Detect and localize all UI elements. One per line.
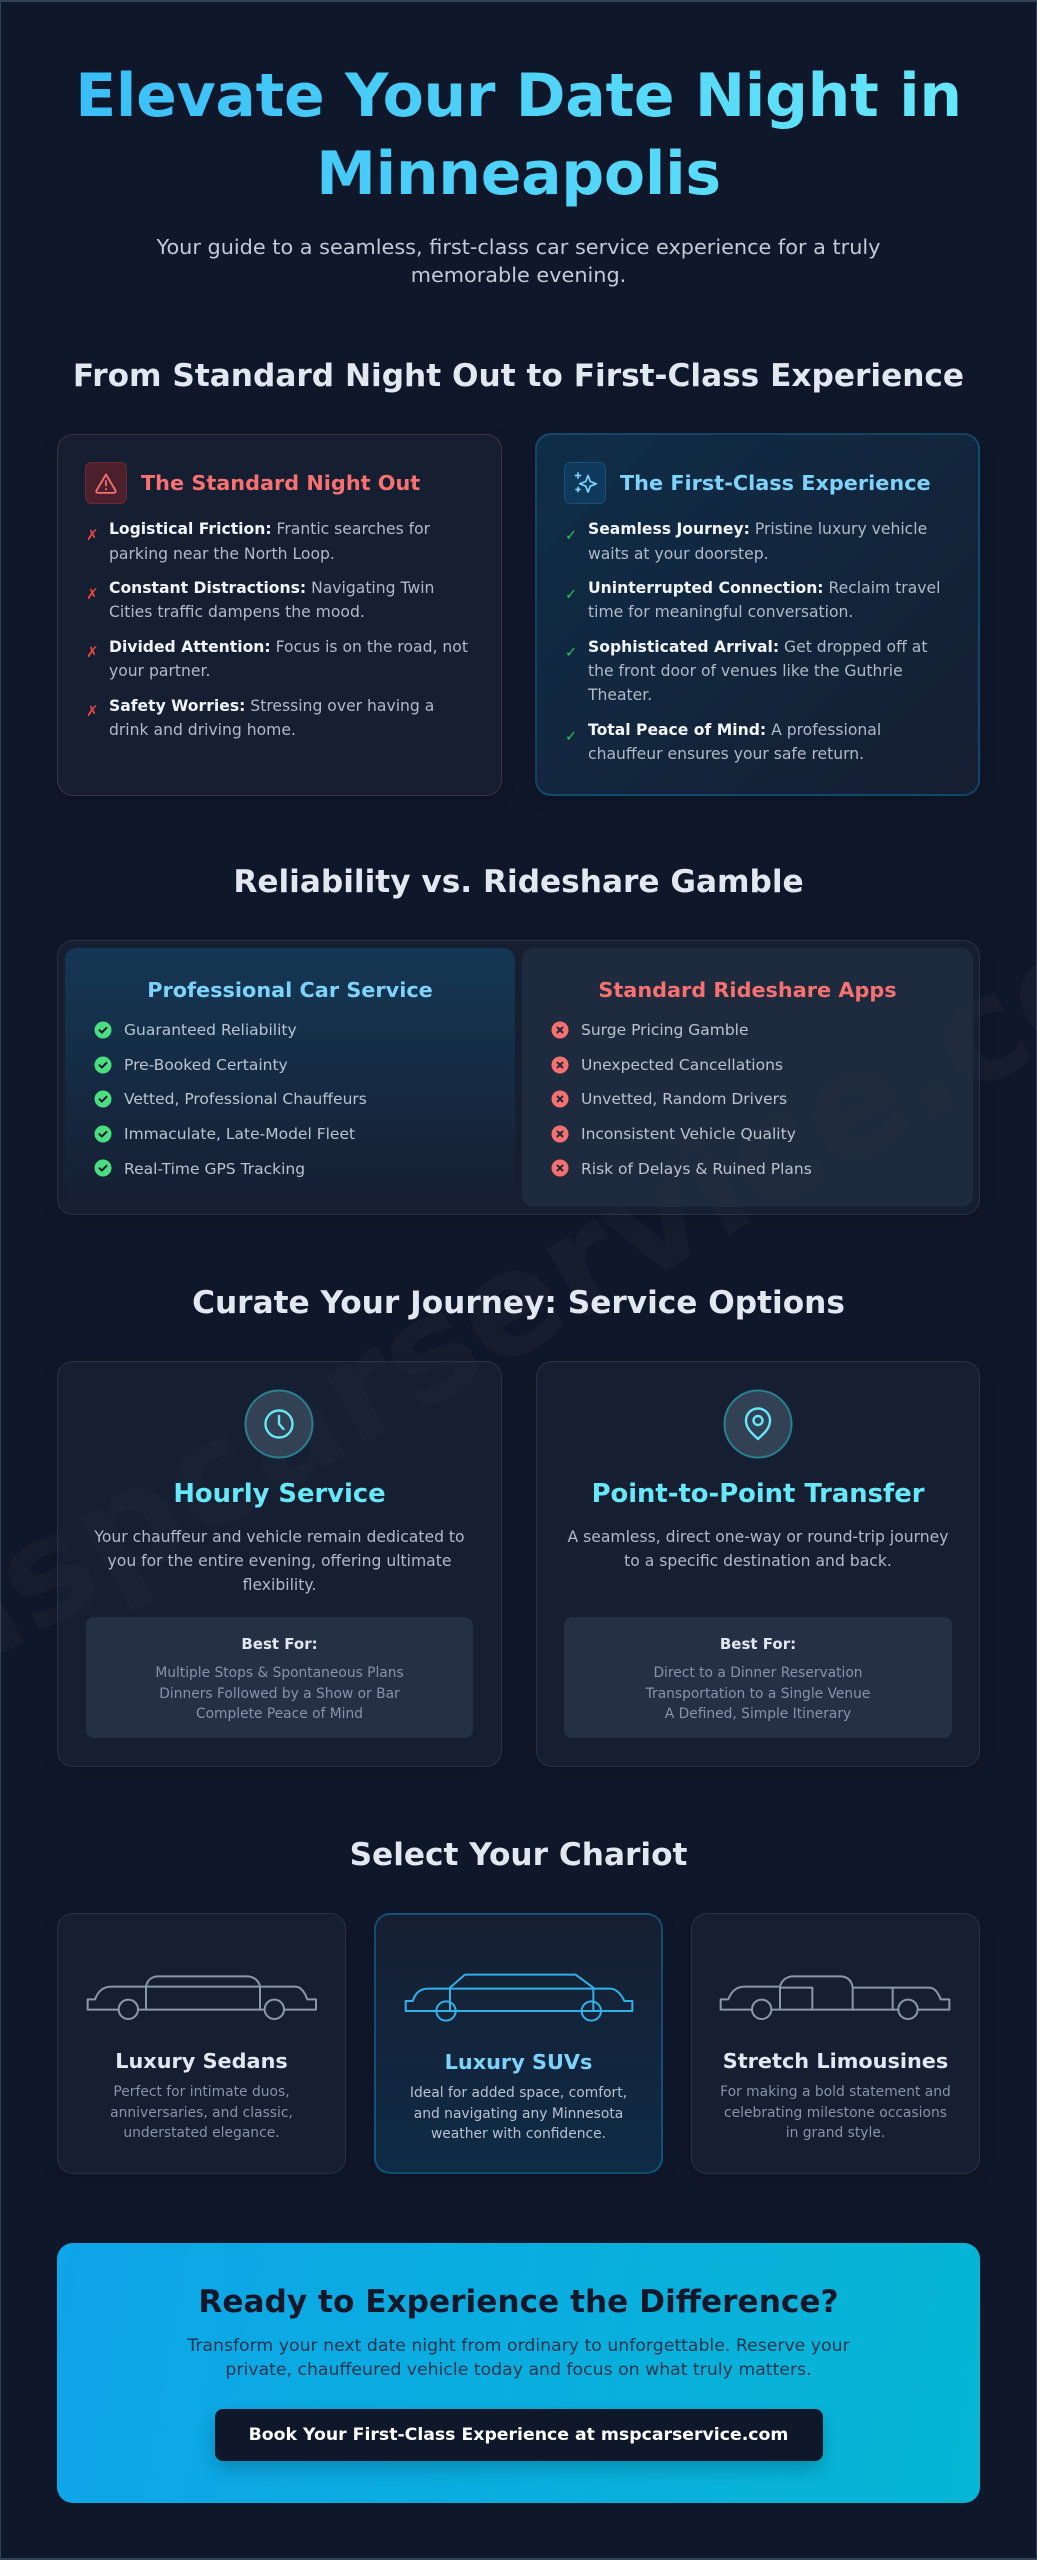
list item: sophisticated arrival: the front door of venues like the Guthrie bbox=[588, 662, 903, 680]
panel: the first-class experience bbox=[535, 433, 980, 796]
icon: limousine bbox=[720, 1975, 950, 2020]
button: book: Book Your First-Class Experience at mspcarservice.com bbox=[249, 2425, 788, 2445]
item: immaculate fleet: Immaculate, Late-Model Fleet bbox=[124, 1125, 355, 1143]
text: limousines description: celebrating milestone occasions bbox=[724, 2105, 947, 2121]
heading: point-to-point transfer: Point-to-Point Transfer bbox=[592, 1479, 924, 1509]
icon: x circle bbox=[552, 1090, 568, 1108]
heading: luxury suvs: Luxury SUVs bbox=[445, 2050, 592, 2074]
text: sedans description: anniversaries, and classic, bbox=[110, 2105, 293, 2121]
panel: professional car service bbox=[65, 948, 515, 1207]
heading: hourly service: Hourly Service bbox=[173, 1479, 386, 1509]
icon: check: ✓ bbox=[565, 729, 577, 745]
item: guaranteed reliability: Guaranteed Reliability bbox=[124, 1021, 297, 1039]
icon: check: ✓ bbox=[565, 645, 577, 661]
icon: cross: ✗ bbox=[86, 526, 99, 544]
button: book bbox=[214, 2409, 822, 2461]
list item: total peace of mind bbox=[588, 721, 881, 763]
heading: best for: Best For: bbox=[241, 1635, 318, 1653]
item: delays: Risk of Delays & Ruined Plans bbox=[581, 1160, 812, 1178]
list: hourly uses bbox=[155, 1665, 404, 1722]
subtitle bbox=[156, 235, 880, 287]
list item: seamless journey: Seamless Journey: Pristine luxury vehicle bbox=[588, 520, 927, 538]
subtitle: memorable evening. bbox=[411, 263, 626, 287]
icon: check circle bbox=[94, 1160, 112, 1176]
text: transfer description: A seamless, direct one-way or round-trip journey bbox=[568, 1528, 948, 1546]
panel: best for transfer bbox=[564, 1617, 952, 1738]
heading: standard rideshare apps: Standard Rideshare Apps bbox=[598, 978, 897, 1002]
text: hourly description: you for the entire evening, offering ultimate bbox=[108, 1552, 451, 1570]
list item: sophisticated arrival: Sophisticated Arrival: Get dropped off at bbox=[588, 638, 927, 656]
text: suvs description: and navigating any Minnesota bbox=[414, 2106, 623, 2122]
heading: the standard night out: The Standard Night Out bbox=[141, 471, 420, 495]
list item: logistical friction bbox=[109, 520, 430, 563]
text: suvs description bbox=[410, 2085, 627, 2142]
list: hourly uses: Complete Peace of Mind bbox=[196, 1706, 363, 1722]
list item: uninterrupted connection bbox=[588, 579, 940, 621]
list item: constant distractions: Constant Distractions: Navigating Twin bbox=[109, 579, 434, 597]
heading: luxury sedans: Luxury Sedans bbox=[115, 2049, 288, 2073]
text: call to action body: Transform your next date night from ordinary to unforgettable. Reserve your bbox=[187, 2336, 850, 2356]
title: Minneapolis bbox=[316, 139, 721, 209]
panel: luxury sedans bbox=[57, 1913, 346, 2174]
icon: x circle bbox=[552, 1160, 568, 1176]
list item: safety worries bbox=[109, 697, 434, 739]
list item: uninterrupted connection: time for meaningful conversation. bbox=[588, 603, 853, 621]
list item: seamless journey bbox=[588, 520, 927, 563]
list item: safety worries: drink and driving home. bbox=[109, 721, 296, 739]
item: pre-booked certainty: Pre-Booked Certainty bbox=[124, 1056, 288, 1074]
text: hourly description bbox=[94, 1528, 465, 1594]
list item: uninterrupted connection: Uninterrupted Connection: Reclaim travel bbox=[588, 579, 940, 597]
text: call to action body bbox=[187, 2336, 850, 2380]
list item: safety worries: Safety Worries: Stressing over having a bbox=[109, 697, 434, 715]
heading: the first-class experience: The First-Class Experience bbox=[620, 471, 931, 495]
item: surge pricing: Surge Pricing Gamble bbox=[581, 1021, 749, 1039]
list: hourly uses: Multiple Stops & Spontaneous Plans bbox=[155, 1665, 404, 1681]
list: transfer uses: A Defined, Simple Itinerary bbox=[665, 1706, 851, 1722]
panel: call to action bbox=[57, 2243, 980, 2503]
text: suvs description: weather with confidence. bbox=[431, 2126, 606, 2142]
heading: select your chariot: Select Your Chariot bbox=[350, 1837, 687, 1873]
icon: check circle bbox=[94, 1126, 112, 1142]
icon: check circle bbox=[94, 1022, 112, 1038]
icon: cross: ✗ bbox=[86, 643, 99, 661]
text: sedans description: Perfect for intimate duos, bbox=[113, 2084, 290, 2100]
icon: check: ✓ bbox=[565, 528, 577, 544]
list item: constant distractions: Cities traffic dampens the mood. bbox=[109, 603, 365, 621]
heading: from standard to first-class: From Standard Night Out to First-Class Experience bbox=[73, 358, 964, 394]
panel: comparison bbox=[57, 940, 980, 1215]
text: hourly description: Your chauffeur and vehicle remain dedicated to bbox=[94, 1528, 465, 1546]
text: hourly description: flexibility. bbox=[243, 1576, 316, 1594]
list item: logistical friction: Logistical Friction: Frantic searches for bbox=[109, 520, 430, 538]
text: call to action body: private, chauffeured vehicle today and focus on what truly matters. bbox=[225, 2360, 812, 2380]
text: transfer description bbox=[568, 1528, 948, 1570]
list: transfer uses: Direct to a Dinner Reservation bbox=[653, 1665, 863, 1681]
text: sedans description bbox=[110, 2084, 293, 2141]
panel: point-to-point transfer bbox=[536, 1361, 980, 1767]
icon: cross: ✗ bbox=[86, 702, 99, 720]
icon: sparkles bbox=[564, 462, 606, 504]
list: transfer uses: Transportation to a Single Venue bbox=[646, 1686, 870, 1702]
icon: check: ✓ bbox=[565, 587, 577, 603]
item: cancellations: Unexpected Cancellations bbox=[581, 1056, 783, 1074]
icon: x circle bbox=[552, 1022, 568, 1038]
panel: the standard night out bbox=[57, 434, 502, 796]
heading: stretch limousines: Stretch Limousines bbox=[723, 2049, 948, 2073]
list item: sophisticated arrival: Theater. bbox=[588, 686, 652, 704]
subtitle: Your guide to a seamless, first-class car service experience for a truly bbox=[157, 235, 880, 259]
list item: total peace of mind: chauffeur ensures your safe return. bbox=[588, 745, 864, 763]
item: random drivers: Unvetted, Random Drivers bbox=[581, 1090, 787, 1108]
heading: service options: Curate Your Journey: Service Options bbox=[192, 1285, 845, 1321]
heading: reliability vs rideshare: Reliability vs. Rideshare Gamble bbox=[233, 864, 804, 900]
text: limousines description: For making a bold statement and bbox=[720, 2084, 951, 2100]
title bbox=[57, 57, 980, 213]
list: transfer uses bbox=[646, 1665, 870, 1722]
icon: sedan bbox=[86, 1975, 317, 2020]
heading: professional car service: Professional Car Service bbox=[147, 978, 433, 1002]
text: transfer description: to a specific destination and back. bbox=[624, 1552, 892, 1570]
item: gps tracking: Real-Time GPS Tracking bbox=[124, 1160, 305, 1178]
icon: check circle bbox=[94, 1056, 112, 1074]
heading: best for: Best For: bbox=[720, 1635, 796, 1653]
panel: standard rideshare apps bbox=[522, 948, 973, 1207]
panel: stretch limousines bbox=[691, 1913, 980, 2174]
icon: clock bbox=[244, 1390, 314, 1458]
panel: hourly service bbox=[57, 1361, 502, 1767]
icon: suv bbox=[404, 1974, 634, 2022]
icon: map pin bbox=[724, 1390, 792, 1458]
text: suvs description: Ideal for added space, comfort, bbox=[410, 2085, 627, 2101]
panel: best for hourly bbox=[86, 1617, 473, 1738]
item: vehicle quality: Inconsistent Vehicle Quality bbox=[581, 1125, 796, 1143]
list: hourly uses: Dinners Followed by a Show or Bar bbox=[159, 1686, 400, 1702]
icon: check circle bbox=[94, 1090, 112, 1108]
item: vetted chauffeurs: Vetted, Professional Chauffeurs bbox=[124, 1090, 367, 1108]
list item: total peace of mind: Total Peace of Mind: A professional bbox=[588, 721, 881, 739]
title: Elevate Your Date Night in bbox=[75, 61, 962, 131]
list item: constant distractions bbox=[109, 579, 434, 621]
heading: ready to experience: Ready to Experience the Difference? bbox=[198, 2284, 839, 2320]
text: limousines description bbox=[720, 2084, 951, 2141]
list item: seamless journey: waits at your doorstep. bbox=[588, 545, 769, 563]
list item: divided attention: Divided Attention: Focus is on the road, not bbox=[109, 638, 468, 656]
icon: cross: ✗ bbox=[86, 585, 99, 603]
list item: sophisticated arrival bbox=[588, 638, 928, 704]
text: limousines description: in grand style. bbox=[786, 2125, 885, 2141]
list item: logistical friction: parking near the North Loop. bbox=[109, 545, 335, 563]
text: sedans description: understated elegance. bbox=[123, 2125, 280, 2141]
icon: warning triangle bbox=[85, 462, 127, 504]
list item: divided attention bbox=[109, 638, 468, 680]
icon: x circle bbox=[552, 1056, 568, 1074]
list item: divided attention: your partner. bbox=[109, 662, 210, 680]
icon: x circle bbox=[552, 1126, 568, 1142]
panel: luxury suvs bbox=[374, 1913, 663, 2174]
